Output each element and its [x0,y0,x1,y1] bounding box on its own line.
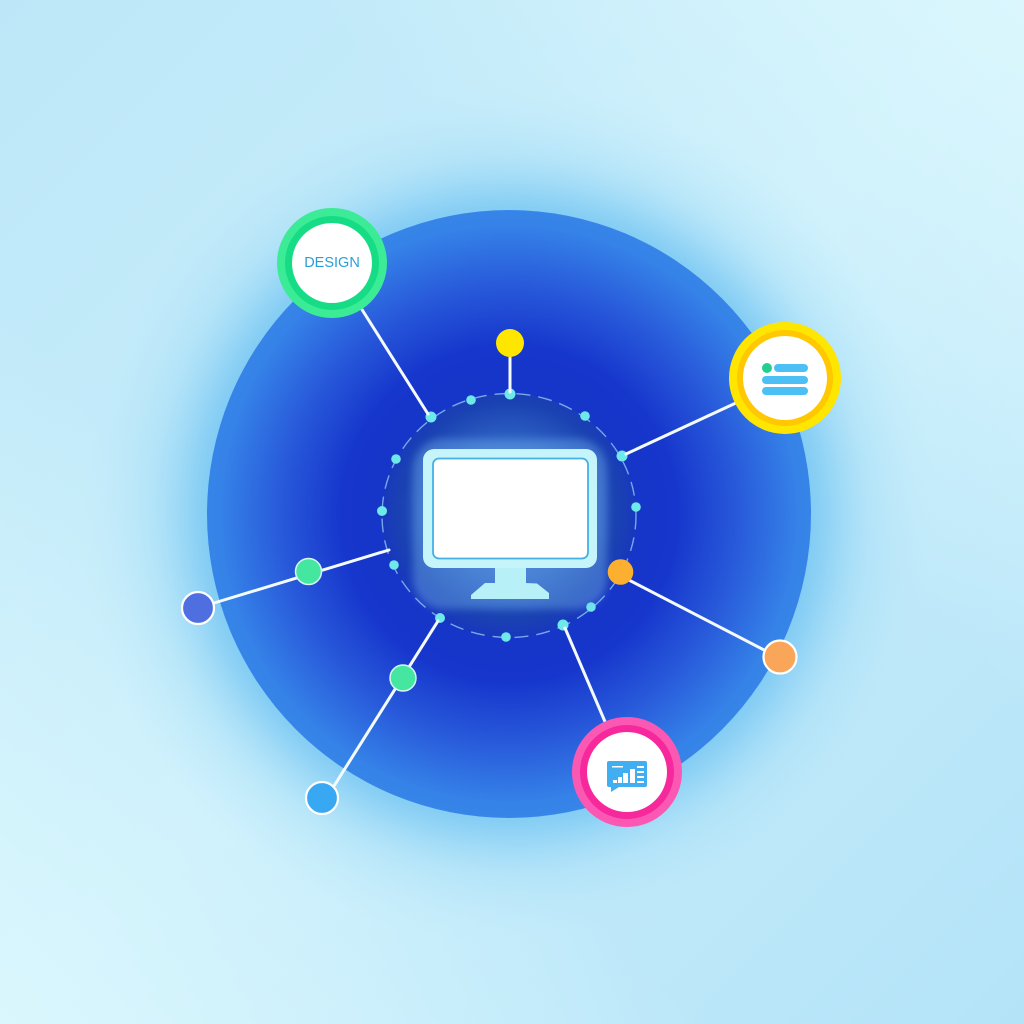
node: indigo outer [182,592,214,624]
node: green upper left spoke [296,558,322,584]
node: yellow top [496,329,524,357]
badge: design: DESIGN [304,255,360,271]
node: green lower spoke [390,665,416,691]
monitor icon [413,439,607,609]
badge: design [277,208,387,318]
connector lines [214,308,768,786]
node: orange inner [608,559,633,585]
central blue disc [207,210,811,818]
node: sky blue outer [306,782,338,814]
badge: list icon [729,322,841,434]
node: orange outer [764,640,796,674]
badge: chart icon [572,717,682,827]
inner dashed ring with nodes [377,388,641,642]
